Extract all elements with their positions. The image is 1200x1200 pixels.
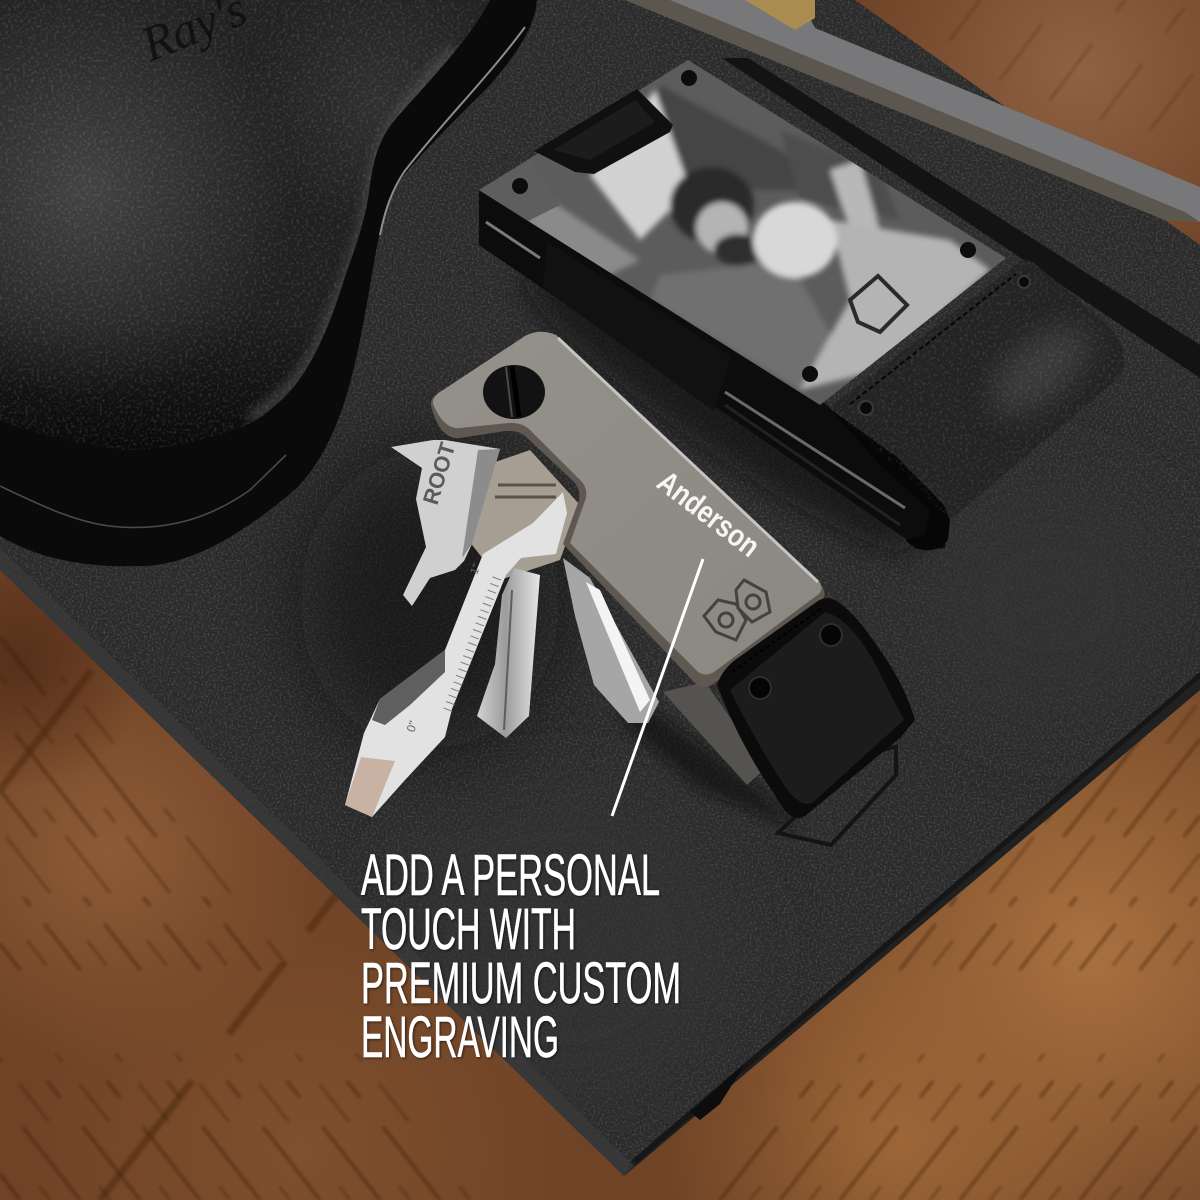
keys and multitools: 0"	[404, 719, 421, 734]
wallet card stack	[479, 190, 950, 550]
card wallet	[479, 60, 1150, 580]
callout text	[361, 843, 681, 1070]
keys and multitools	[345, 439, 800, 830]
keyring spacer and key heads	[472, 450, 580, 580]
long ruler multitool	[345, 492, 567, 817]
keys and multitools: 1"	[469, 562, 483, 576]
engraved photo plate	[479, 60, 1006, 405]
black leather case	[0, 0, 540, 566]
root multitool	[391, 440, 500, 606]
seam lines on case	[380, 27, 525, 235]
keys and multitools: ROOT	[418, 439, 461, 507]
organizer shadow on notebook	[620, 700, 800, 830]
organizer back plate	[663, 682, 766, 785]
engraved logo	[704, 580, 770, 640]
pen / knife tool at top	[625, 0, 1200, 222]
engraved name: Anderson	[651, 464, 767, 564]
key left	[477, 568, 540, 738]
callout text: ENGRAVING	[361, 1005, 559, 1070]
slotted screw	[483, 365, 545, 419]
titanium organizer body	[431, 332, 825, 687]
callout pointer line	[612, 559, 703, 816]
leather tab top	[534, 89, 673, 174]
callout text: PREMIUM CUSTOM	[361, 951, 681, 1016]
key right	[563, 558, 659, 723]
callout text: ADD A PERSONAL	[361, 843, 660, 908]
leather money loop	[829, 260, 1125, 520]
callout text: TOUCH WITH	[361, 897, 576, 962]
leather key loop	[717, 598, 915, 845]
wire clip	[778, 747, 896, 845]
wallet logo	[850, 276, 907, 332]
elastic band	[543, 242, 731, 411]
